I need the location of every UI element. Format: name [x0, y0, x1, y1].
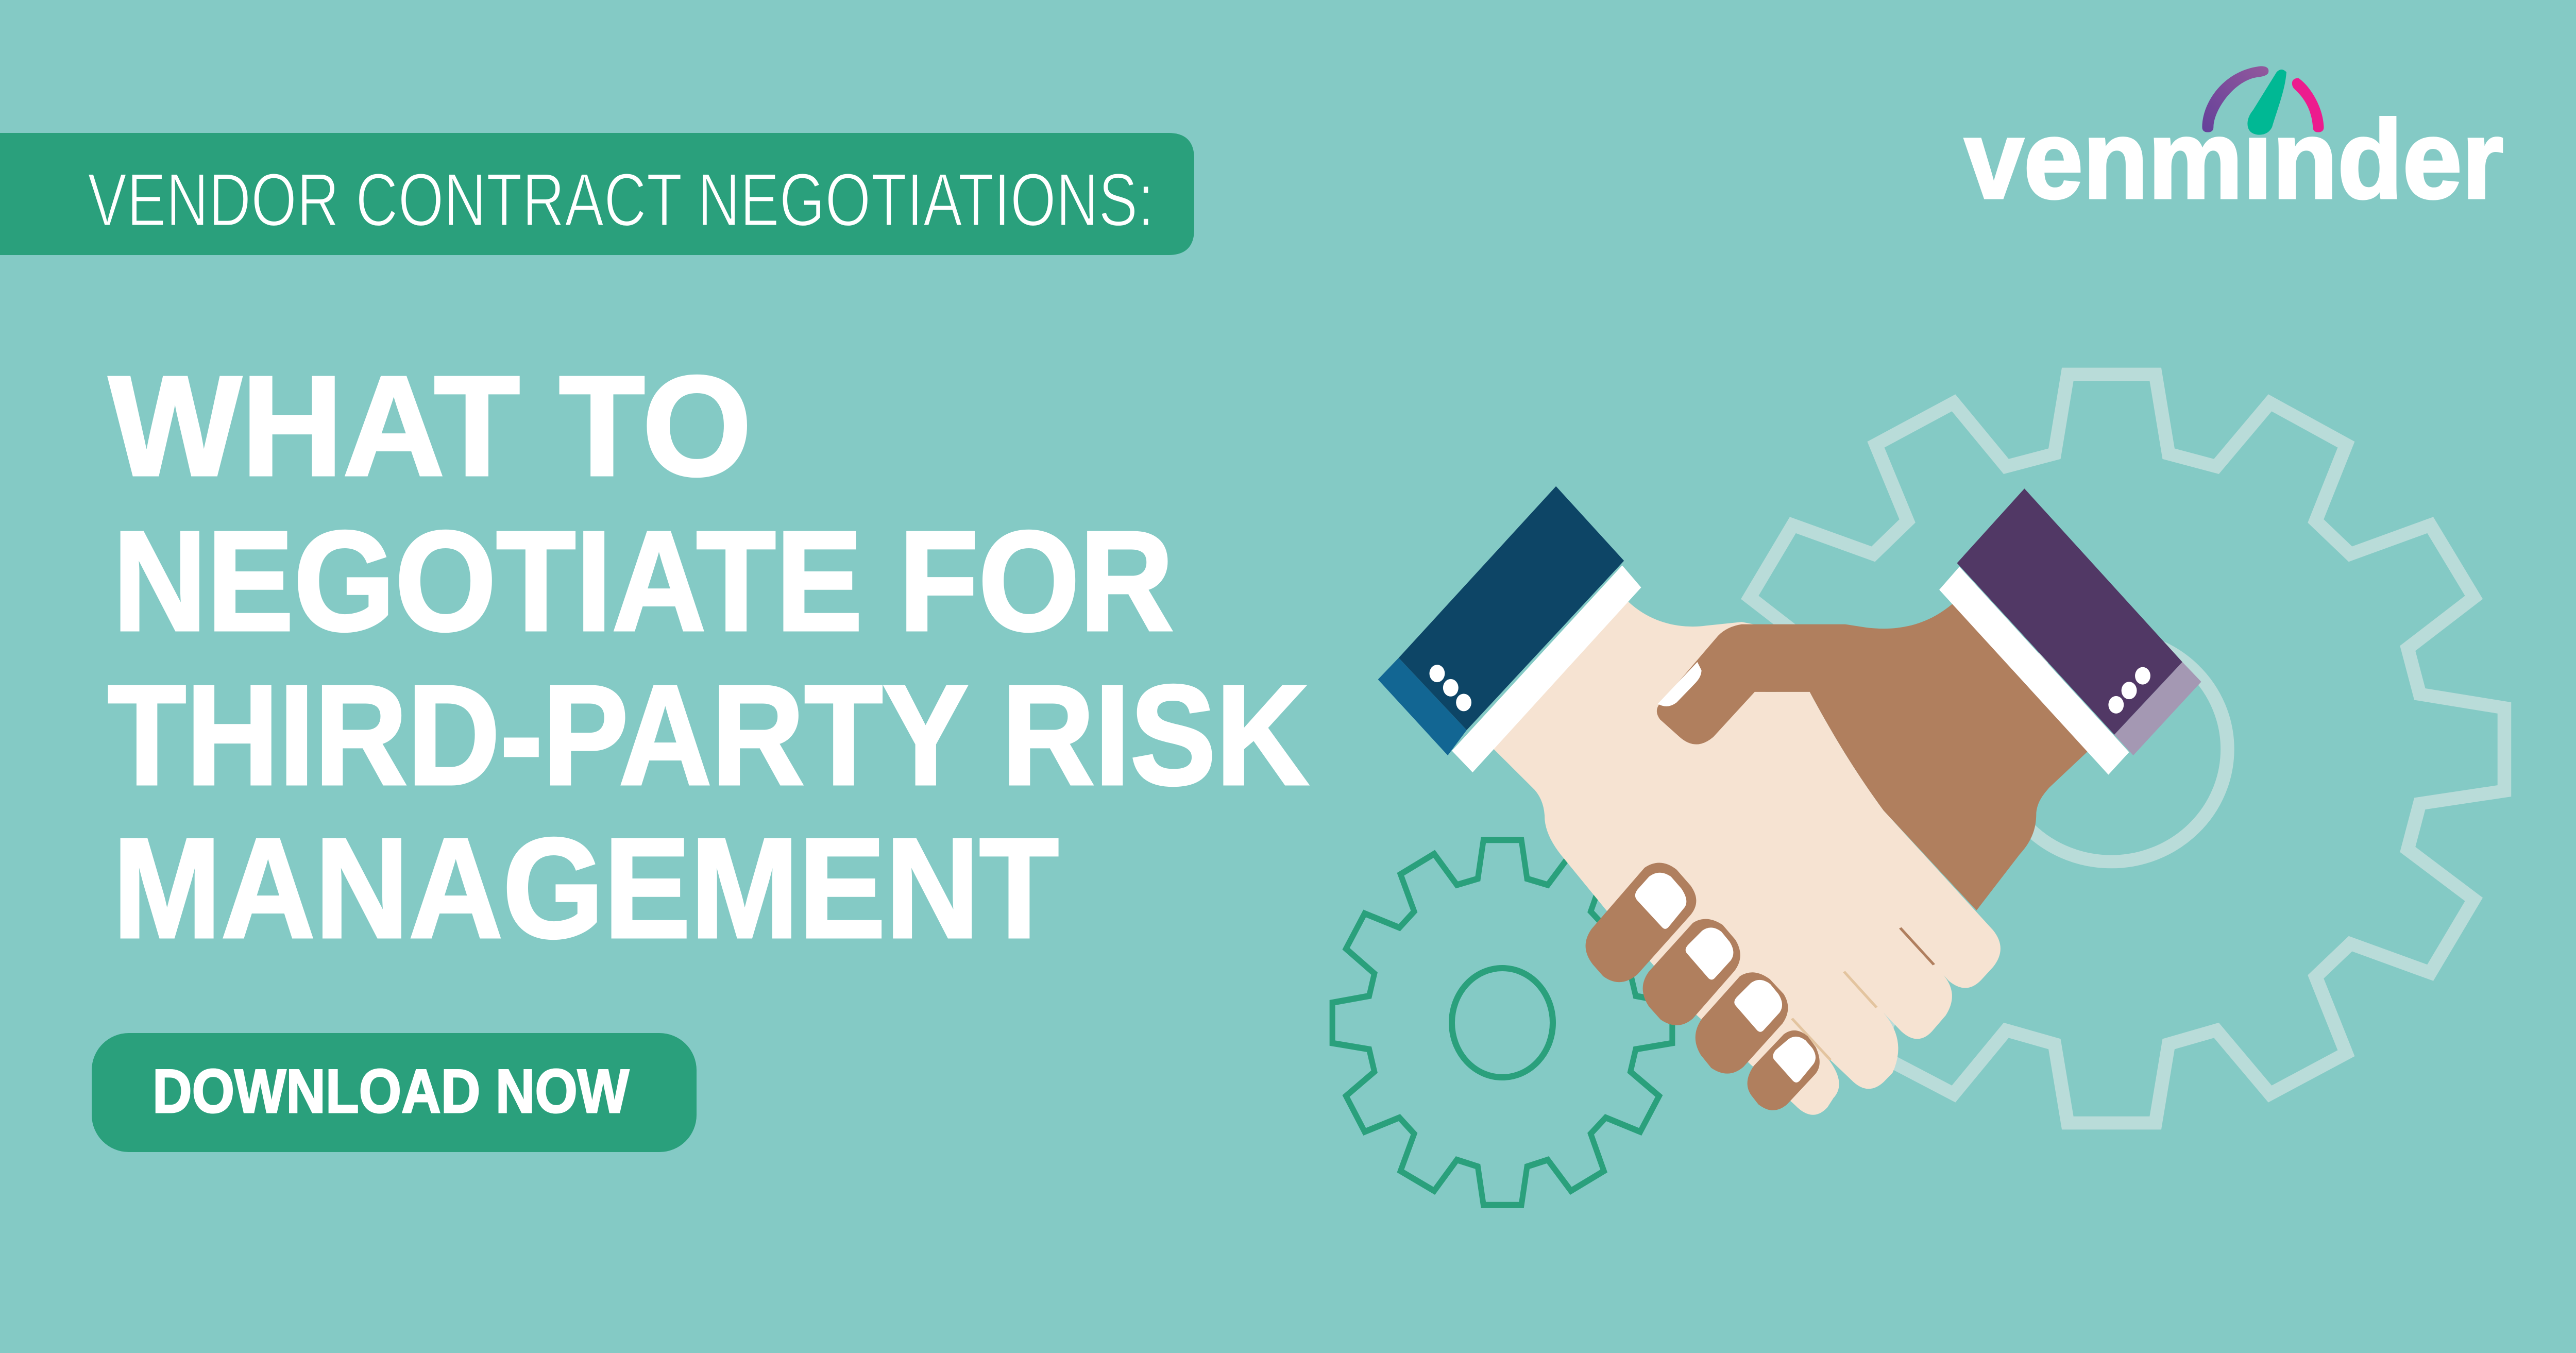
title: THIRD-PARTY RISK: [108, 656, 1309, 815]
banner text: VENDOR CONTRACT NEGOTIATIONS:: [88, 158, 1154, 242]
left cuff: [1378, 486, 1641, 772]
large background gear: [1718, 374, 2504, 1123]
brown hand: [1657, 599, 2096, 910]
brown fingers with nails: [1586, 863, 1820, 1110]
finger crease lines: [1792, 928, 1934, 1060]
logo gauge icon: [2202, 66, 2324, 135]
small green gear: [1332, 840, 1672, 1205]
button label: DOWNLOAD NOW: [152, 1057, 630, 1126]
title: WHAT TO: [109, 347, 752, 505]
handshake illustration: [1378, 486, 2201, 1115]
right cuff: [1939, 488, 2201, 775]
cream hand: [1484, 597, 2001, 1115]
title: MANAGEMENT: [113, 809, 1059, 968]
thumb nail: [1658, 662, 1702, 706]
venminder logo: venminder: [1964, 97, 2503, 222]
banner: [0, 133, 1194, 255]
title: NEGOTIATE FOR: [113, 502, 1174, 661]
download button: [92, 1033, 697, 1152]
title: [108, 347, 1309, 968]
